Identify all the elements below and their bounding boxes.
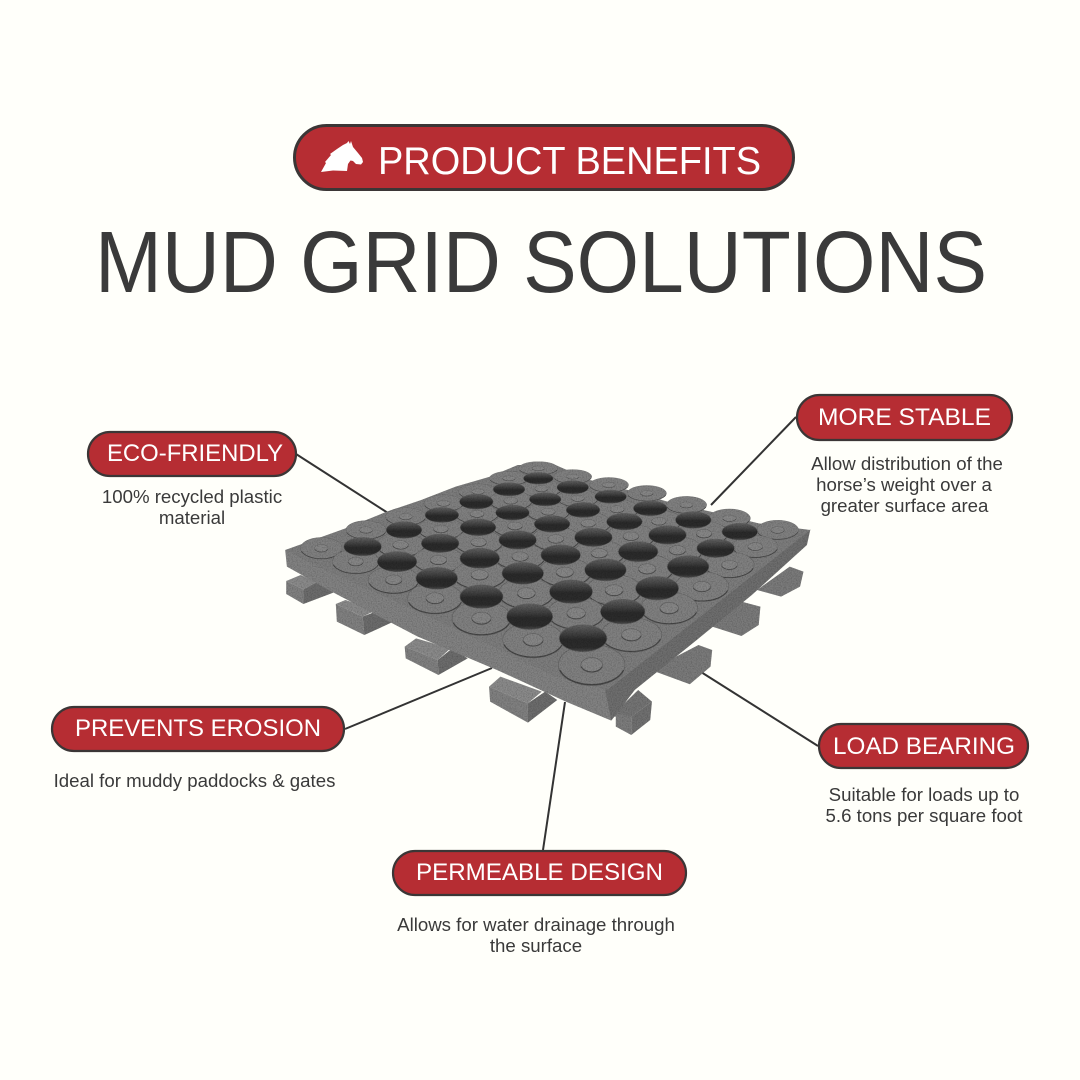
callout: eco-friendly: 100% recycled plastic	[102, 486, 282, 507]
callout: permeable design: Allows for water drainage through	[397, 914, 675, 935]
callout: prevents erosion: PREVENTS EROSION	[75, 715, 321, 742]
callout: eco-friendly	[88, 432, 296, 528]
callout: load bearing	[819, 724, 1028, 826]
callout: prevents erosion: Ideal for muddy paddocks & gates	[54, 770, 335, 791]
callout: more stable: horse’s weight over a	[816, 474, 993, 495]
callout: permeable design: the surface	[490, 935, 582, 956]
callout: more stable	[797, 395, 1012, 516]
mat top surface	[285, 462, 810, 690]
callout: more stable: Allow distribution of the	[811, 453, 1003, 474]
header badge: product benefits	[294, 126, 794, 190]
callout: permeable design	[393, 851, 686, 956]
badge text: PRODUCT BENEFITS	[378, 140, 761, 183]
callout: eco-friendly: ECO-FRIENDLY	[107, 440, 283, 467]
connector: load bearing	[701, 672, 818, 746]
callout: more stable: MORE STABLE	[818, 404, 991, 431]
mat side faces	[285, 529, 810, 721]
callout: more stable: greater surface area	[821, 495, 989, 516]
callout: eco-friendly: material	[159, 507, 225, 528]
mat feet	[286, 567, 803, 735]
title: MUD GRID SOLUTIONS	[95, 214, 987, 311]
connector: permeable design	[543, 702, 565, 850]
callout: load bearing: Suitable for loads up to	[829, 784, 1019, 805]
icon: horse head	[321, 141, 363, 172]
callout: permeable design: PERMEABLE DESIGN	[416, 859, 663, 886]
callout: load bearing: LOAD BEARING	[833, 733, 1015, 760]
raised rings and bosses	[300, 462, 799, 686]
connector: more stable	[711, 417, 796, 505]
drainage holes	[344, 472, 758, 652]
product image: mud grid mat	[285, 462, 810, 735]
callout: load bearing: 5.6 tons per square foot	[826, 805, 1023, 826]
connector: prevents erosion	[345, 668, 492, 729]
connector: eco-friendly	[296, 454, 388, 513]
callout: prevents erosion	[52, 707, 344, 791]
